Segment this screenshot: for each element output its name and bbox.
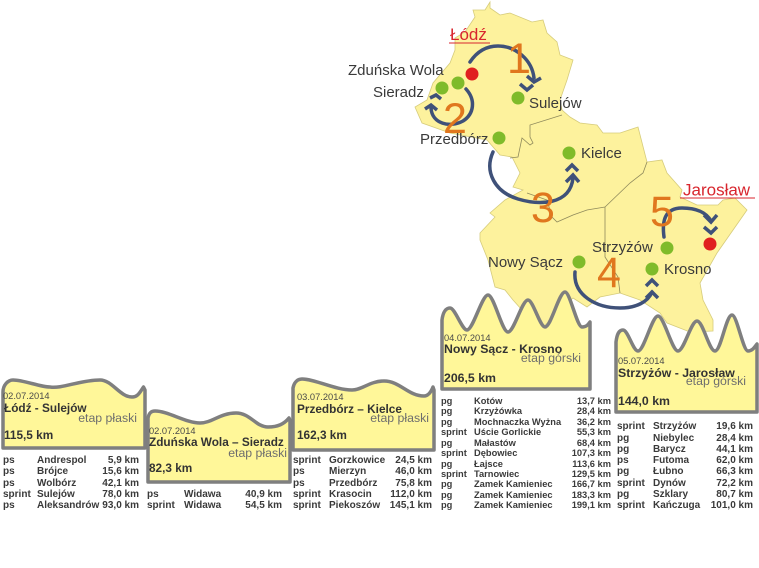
stage 3 checkpoints: Krasocin [329, 489, 372, 500]
stage 4 checkpoints: Zamek Kamieniec [474, 479, 553, 489]
stage 4 checkpoints: pg [441, 500, 453, 510]
stage numbers [443, 35, 674, 297]
stage 1 checkpoints: sprint [3, 489, 31, 500]
stage 5 checkpoints: ps [617, 455, 629, 466]
stage 1 checkpoints: ps [3, 500, 15, 511]
stage 1 checkpoints: 5,9 km [108, 455, 139, 466]
stage 2 checkpoints: ps [147, 489, 159, 500]
stage 5 checkpoints [617, 421, 753, 511]
stage 1 checkpoints: ps [3, 466, 15, 477]
stage 4 checkpoints: pg [441, 406, 453, 416]
stage 1 checkpoints: Sulejów [37, 489, 75, 500]
stage 3 checkpoints: Gorzkowice [329, 455, 386, 466]
stage numbers: 1 [507, 35, 531, 83]
stage 5 checkpoints: 80,7 km [716, 489, 753, 500]
stage 5 checkpoints: 66,3 km [716, 466, 753, 477]
stage 4 checkpoints: sprint [441, 427, 467, 437]
stage 4 checkpoints: 68,4 km [577, 438, 611, 448]
panel: stage 3: Przedbórz – Kielce [297, 402, 402, 416]
city labels: Strzyżów [592, 239, 653, 256]
stage 5 checkpoints: 28,4 km [716, 433, 753, 444]
stage 1 checkpoints: Wolbórz [37, 478, 76, 489]
stage 1 checkpoints: ps [3, 455, 15, 466]
stage 5 checkpoints: pg [617, 466, 629, 477]
stage 4 checkpoints [441, 396, 611, 510]
start label: Łódź: Łódź [450, 25, 487, 44]
city labels: Sulejów [529, 95, 582, 112]
stage 5 checkpoints: Szklary [653, 489, 688, 500]
stage 4 checkpoints: Zamek Kamieniec [474, 500, 553, 510]
finish label: Jarosław: Jarosław [683, 180, 751, 200]
stage 4 checkpoints: Małastów [474, 438, 517, 448]
stage 2 checkpoints [147, 489, 282, 511]
stage 5 checkpoints: sprint [617, 478, 645, 489]
stage 5 checkpoints: Futoma [653, 455, 690, 466]
stage numbers: 3 [531, 184, 555, 232]
panel: stage 4: 04.07.2014 [444, 333, 491, 343]
stage 1 checkpoints: ps [3, 478, 15, 489]
stage 4 checkpoints: Kotów [474, 396, 503, 406]
stage 4 checkpoints: 113,6 km [572, 459, 611, 469]
stage 1 checkpoints: 42,1 km [102, 478, 139, 489]
arrow: stage 5 [663, 208, 717, 237]
panel: stage 2 [148, 411, 290, 482]
panel: stage 5: Strzyżów - Jarosław [618, 366, 735, 380]
stage 3 checkpoints: ps [293, 478, 305, 489]
stage 5 checkpoints: 62,0 km [716, 455, 753, 466]
panel: stage 3: 03.07.2014 [297, 392, 344, 402]
panel: stage 1: Łódź - Sulejów [4, 401, 87, 415]
stage 5 checkpoints: 44,1 km [716, 444, 753, 455]
panel: stage 1 [3, 380, 145, 448]
panel: stage 4 [442, 292, 590, 389]
stage numbers: 5 [650, 188, 674, 236]
panel: stage 2: 02.07.2014 [149, 426, 196, 436]
stage 4 checkpoints: 13,7 km [577, 396, 611, 406]
stage 1 checkpoints: 78,0 km [102, 489, 139, 500]
stage 4 checkpoints: Łajsce [474, 459, 503, 469]
stage 3 checkpoints: sprint [293, 455, 321, 466]
stage 4 checkpoints: 199,1 km [572, 500, 611, 510]
stage 4 checkpoints: 129,5 km [572, 469, 611, 479]
stage 3 checkpoints: 46,0 km [395, 466, 432, 477]
panel: stage 1: 02.07.2014 [3, 391, 50, 401]
panel: stage 5: 144,0 km [618, 394, 670, 408]
map of route regions [415, 2, 747, 332]
stage 4 checkpoints: sprint [441, 448, 467, 458]
panel: stage 4: 206,5 km [444, 371, 496, 385]
stage 4 checkpoints: 28,4 km [577, 406, 611, 416]
stage 4 checkpoints: pg [441, 417, 453, 427]
stage 2 checkpoints: 40,9 km [245, 489, 282, 500]
city labels: Przedbórz [420, 131, 488, 148]
stage 4 checkpoints: Krzyżówka [474, 406, 523, 416]
stage 1 checkpoints: Aleksandrów [37, 500, 99, 511]
stage numbers: 4 [597, 249, 621, 297]
stage 4 checkpoints: Uście Gorlickie [474, 427, 541, 437]
stage 4 checkpoints: Dębowiec [474, 448, 517, 458]
stage 3 checkpoints: 75,8 km [395, 478, 432, 489]
stage 1 checkpoints: Andrespol [37, 455, 87, 466]
stage 4 checkpoints: Tarnowiec [474, 469, 519, 479]
stage 4 checkpoints: pg [441, 479, 453, 489]
arrow: stage 4 [575, 272, 658, 308]
city labels: Krosno [664, 261, 712, 278]
stage 3 checkpoints: ps [293, 466, 305, 477]
stage 3 checkpoints: sprint [293, 489, 321, 500]
panel: stage 4: Nowy Sącz - Krosno [444, 342, 563, 356]
stage 3 checkpoints [293, 455, 432, 511]
stage 5 checkpoints: Strzyżów [653, 421, 697, 432]
panel: stage 5: 05.07.2014 [618, 356, 665, 366]
panel: stage 5 [616, 315, 757, 412]
stage 4 checkpoints: pg [441, 396, 453, 406]
stage 2 checkpoints: 54,5 km [245, 500, 282, 511]
stage 3 checkpoints: sprint [293, 500, 321, 511]
arrow: stage 1 [470, 46, 541, 90]
stage 5 checkpoints: Łubno [653, 466, 684, 477]
stage 5 checkpoints: Barycz [653, 444, 686, 455]
panel: stage 3: etap płaski [370, 411, 429, 425]
stage 4 checkpoints: 166,7 km [572, 479, 611, 489]
stage 4 checkpoints: 107,3 km [572, 448, 611, 458]
stage 5 checkpoints: 72,2 km [716, 478, 753, 489]
stage 1 checkpoints: Brójce [37, 466, 69, 477]
panel: stage 3: 162,3 km [297, 428, 347, 442]
panel: stage 2: 82,3 km [149, 461, 192, 475]
stage 3 checkpoints: 24,5 km [395, 455, 432, 466]
panel: stage 5: etap górski [686, 374, 746, 388]
panel: stage 4: etap górski [521, 351, 581, 365]
stage 3 checkpoints: Piekoszów [329, 500, 380, 511]
panel: stage 3 [293, 379, 434, 450]
city labels [348, 62, 712, 278]
stage 2 checkpoints: Widawa [184, 500, 222, 511]
stage 5 checkpoints: pg [617, 433, 629, 444]
stage 5 checkpoints: Kańczuga [653, 500, 701, 511]
stage 4 checkpoints: sprint [441, 469, 467, 479]
stage 4 checkpoints: 55,3 km [577, 427, 611, 437]
stage 4 checkpoints: pg [441, 459, 453, 469]
panel: stage 2: Zduńska Wola – Sieradz [149, 435, 284, 449]
arrow: stage 3 [490, 152, 579, 202]
stage 4 checkpoints: 36,2 km [577, 417, 611, 427]
stage 5 checkpoints: 101,0 km [711, 500, 753, 511]
city labels: Kielce [581, 145, 622, 162]
stage 1 checkpoints: 15,6 km [102, 466, 139, 477]
stage 5 checkpoints: sprint [617, 500, 645, 511]
city labels: Zduńska Wola [348, 62, 444, 79]
panel: stage 1: etap płaski [78, 411, 137, 425]
stage 1 checkpoints [3, 455, 139, 511]
stage 5 checkpoints: pg [617, 444, 629, 455]
stage 3 checkpoints: 112,0 km [390, 489, 432, 500]
stage 5 checkpoints: pg [617, 489, 629, 500]
stage 4 checkpoints: Mochnaczka Wyżna [474, 417, 562, 427]
stage numbers: 2 [443, 95, 467, 143]
stage 4 checkpoints: pg [441, 438, 453, 448]
stage 2 checkpoints: sprint [147, 500, 175, 511]
city labels: Nowy Sącz [488, 254, 563, 271]
arrow: stage 2 [425, 89, 472, 124]
stage 5 checkpoints: Niebylec [653, 433, 695, 444]
stage 3 checkpoints: 145,1 km [390, 500, 432, 511]
stage 4 checkpoints: pg [441, 490, 453, 500]
city labels: Sieradz [373, 84, 424, 101]
city markers [436, 68, 716, 276]
stage 2 checkpoints: Widawa [184, 489, 222, 500]
stage 4 checkpoints: 183,3 km [572, 490, 611, 500]
panel: stage 1: 115,5 km [4, 428, 53, 442]
stage 5 checkpoints: sprint [617, 421, 645, 432]
stage 5 checkpoints: Dynów [653, 478, 686, 489]
stage 1 checkpoints: 93,0 km [102, 500, 139, 511]
stage 3 checkpoints: Przedbórz [329, 478, 377, 489]
stage 5 checkpoints: 19,6 km [716, 421, 753, 432]
stage 4 checkpoints: Zamek Kamieniec [474, 490, 553, 500]
panel: stage 2: etap płaski [228, 446, 287, 460]
stage 3 checkpoints: Mierzyn [329, 466, 366, 477]
